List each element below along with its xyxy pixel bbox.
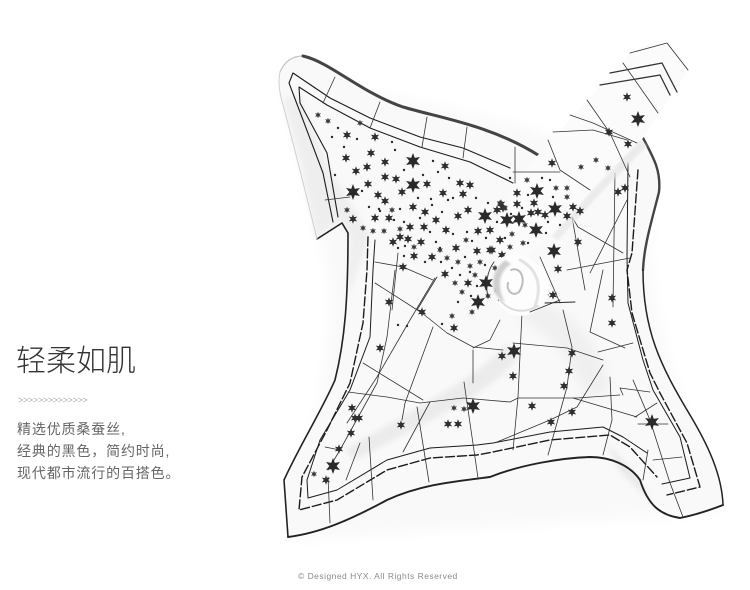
footer copyright: © Designed HYX. All Rights Reserved: [298, 571, 458, 581]
description text: [17, 421, 180, 481]
description text: 现代都市流行的百搭色。: [17, 465, 180, 481]
inner frame lines: [289, 73, 700, 510]
scarf cast shadow: [280, 76, 720, 540]
description text: 精选优质桑蚕丝,: [17, 421, 126, 437]
scarf body: [279, 56, 723, 537]
small dots: [332, 128, 560, 326]
scarf border: [279, 56, 723, 537]
rolled scarf corner: [496, 42, 689, 275]
fabric rose knot: [487, 255, 575, 316]
description text: 经典的黑色，简约时尚,: [17, 443, 170, 459]
fold shading: [283, 95, 370, 300]
chevron divider: >>>>>>>>>>>>>>: [18, 395, 87, 405]
star field: [311, 92, 659, 485]
constellation grid lines: [323, 77, 683, 523]
heading: 轻柔如肌: [16, 345, 136, 378]
